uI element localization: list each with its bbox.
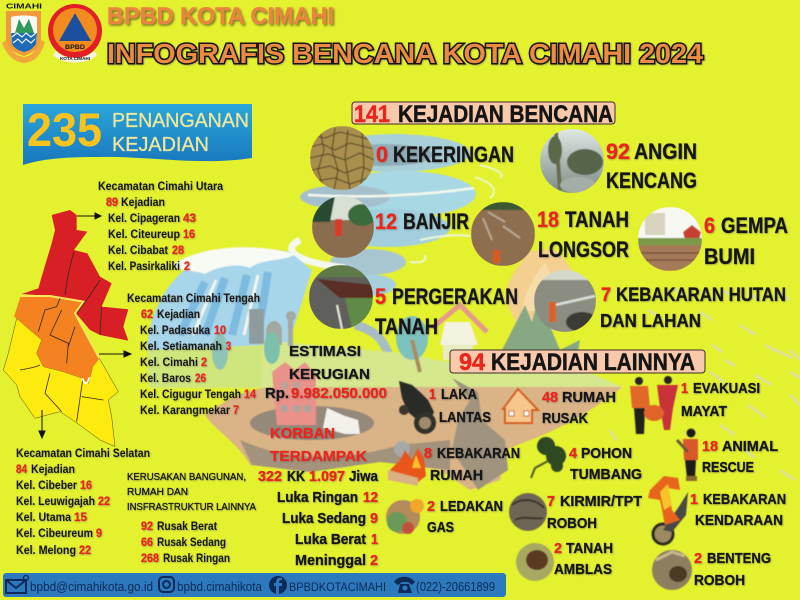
label: banjir: 12 <box>375 209 397 234</box>
label: angin kencang: ANGIN <box>634 139 697 164</box>
label: ledakan gas: LEDAKAN <box>440 498 503 515</box>
text block: korban terdampak: Luka Berat <box>295 531 366 548</box>
label: tanah amblas <box>554 540 613 578</box>
text block: Kecamatan Cimahi Utara: 89 <box>106 195 118 209</box>
text block: korban terdampak: 1.097 <box>309 468 345 485</box>
ground with crater <box>205 387 622 490</box>
icon: burnt motorcycle <box>399 381 436 434</box>
text block: Kecamatan Cimahi Tengah: Kel. Baros <box>140 371 191 385</box>
text block: Kecamatan Cimahi Utara: 16 <box>183 227 195 241</box>
label: pohon tumbang: TUMBANG <box>570 466 642 483</box>
label: kebakaran hutan: 7 <box>601 285 611 306</box>
photo: kekeringan <box>310 126 374 190</box>
label: tanah amblas: TANAH <box>566 540 613 557</box>
label: ledakan gas: 2 <box>427 498 435 515</box>
text block: Kecamatan Cimahi Tengah: Kecamatan Cimahi Tengah <box>127 291 260 305</box>
label: tanah amblas: AMBLAS <box>554 561 612 578</box>
label: kebakaran rumah: 8 <box>424 445 432 462</box>
label: rumah rusak: RUMAH <box>562 389 616 406</box>
banner: 235 penanganan kejadian: PENANGANAN <box>112 110 249 132</box>
text block: Kecamatan Cimahi Tengah: Kel. Karangmekar <box>140 403 230 417</box>
text block: kerusakan bangunan: INSFRASTRUKTUR LAINNYA <box>127 501 256 513</box>
text block: korban terdampak: 2 <box>370 552 378 569</box>
icon: instagram <box>159 577 174 592</box>
icon: fallen tree <box>531 437 566 478</box>
text block: kerusakan bangunan: Rusak Ringan <box>163 551 230 565</box>
text block: estimasi kerugian: KERUGIAN <box>289 366 370 383</box>
text block: Kecamatan Cimahi Tengah: 14 <box>244 387 256 401</box>
label: tanah longsor: LONGSOR <box>538 237 629 262</box>
label: angin kencang <box>606 139 697 193</box>
text block: Kecamatan Cimahi Tengah: 10 <box>214 323 226 337</box>
text: instagram: bpbd.cimahikota <box>177 579 263 594</box>
text block: korban terdampak: 12 <box>363 489 378 506</box>
label: laka lantas: LAKA <box>441 386 477 403</box>
text block: korban terdampak: Luka Ringan <box>277 489 358 506</box>
text block: korban terdampak: TERDAMPAK <box>270 448 367 465</box>
text: email: bpbd@cimahikota.go.id <box>30 579 153 594</box>
city skyline <box>212 309 296 370</box>
label: rumah rusak: RUSAK <box>542 410 588 427</box>
icon: burning motorcycle <box>648 476 688 544</box>
label: kebakaran kendaraan: KEBAKARAN <box>703 491 786 508</box>
photo: pergerakan tanah <box>309 265 373 329</box>
banner: 235 penanganan kejadian <box>23 103 252 165</box>
text block: Kecamatan Cimahi Selatan: 9 <box>96 526 102 540</box>
label: angin kencang: KENCANG <box>606 168 697 193</box>
text block: Kecamatan Cimahi Utara: Kecamatan Cimahi Utara <box>98 179 223 193</box>
arrow: Cimahi Selatan <box>39 410 45 438</box>
photo: benteng roboh <box>652 550 692 590</box>
label: kebakaran kendaraan: KENDARAAN <box>695 512 783 529</box>
text block: estimasi kerugian <box>265 343 387 402</box>
truck <box>323 408 360 434</box>
logo: BPBD <box>48 4 102 62</box>
label: kirmir/TPT roboh: KIRMIR/TPT <box>560 493 642 510</box>
text block: Kecamatan Cimahi Utara: Kel. Pasirkaliki <box>108 259 180 273</box>
district: Cimahi Utara <box>22 210 128 341</box>
label: evakuasi mayat: EVAKUASI <box>693 380 760 397</box>
text block: Kecamatan Cimahi Utara: 28 <box>172 243 184 257</box>
text: facebook: BPBDKOTACIMAHI <box>289 580 386 594</box>
text block: korban terdampak: KORBAN <box>270 425 335 442</box>
label: pohon tumbang <box>569 445 642 483</box>
text block: Kecamatan Cimahi Selatan: Kejadian <box>31 462 75 476</box>
text block: Kecamatan Cimahi Tengah: Kejadian <box>157 307 200 321</box>
text block: Kecamatan Cimahi Tengah: Kel. Setiamanah <box>140 339 222 353</box>
text block: kerusakan bangunan: Rusak Berat <box>157 519 217 533</box>
label: rumah rusak <box>542 389 616 427</box>
house <box>396 305 487 372</box>
text block: korban terdampak: Jiwa <box>349 468 379 485</box>
label: tanah longsor: TANAH <box>565 207 629 232</box>
label: pergerakan tanah <box>375 284 518 339</box>
text block: Kecamatan Cimahi Selatan <box>16 446 150 557</box>
label: kebakaran hutan <box>600 285 786 331</box>
text: telephone: (022)-20661899 <box>416 579 495 594</box>
text block: kerusakan bangunan: 92 <box>141 519 153 533</box>
district: Cimahi Tengah <box>14 296 99 383</box>
photo: tanah amblas <box>516 543 554 581</box>
background illustration: disaster scene <box>147 134 800 490</box>
text block: korban terdampak: Meninggal <box>295 552 366 569</box>
text block: Kecamatan Cimahi Selatan: 22 <box>98 494 110 508</box>
text block: Kecamatan Cimahi Tengah: 62 <box>141 307 153 321</box>
label: pergerakan tanah: TANAH <box>375 314 438 339</box>
label: pohon tumbang: 4 <box>569 445 578 462</box>
text block: Kecamatan Cimahi Utara: Kejadian <box>121 195 165 209</box>
label: evakuasi mayat: MAYAT <box>681 403 727 420</box>
icon: damaged house <box>503 389 538 423</box>
text block: Kecamatan Cimahi Selatan: Kel. Leuwigajah <box>16 494 95 508</box>
label: tanah longsor <box>537 207 629 262</box>
icon: animal rescue officer <box>677 428 698 481</box>
text block: kerusakan bangunan <box>127 471 256 565</box>
label: gempa bumi: BUMI <box>704 244 755 269</box>
text block: estimasi kerugian: 9.982.050.000 <box>291 385 387 402</box>
label: pohon tumbang: POHON <box>581 445 632 462</box>
label: benteng roboh: ROBOH <box>694 572 745 589</box>
icon: telephone <box>394 577 415 593</box>
text block: Kecamatan Cimahi Utara: Kel. Citeureup <box>108 227 180 241</box>
label: evakuasi mayat <box>681 380 760 420</box>
heading: 94 kejadian lainnya: KEJADIAN LAINNYA <box>491 349 695 376</box>
text block: Kecamatan Cimahi Tengah <box>127 291 260 417</box>
footer contact bar <box>3 573 506 597</box>
forest fire <box>502 249 585 352</box>
photo: banjir <box>312 196 376 258</box>
text block: Kecamatan Cimahi Selatan: Kecamatan Cimahi Selatan <box>16 446 150 460</box>
label: ledakan gas: GAS <box>427 519 454 536</box>
text block: Kecamatan Cimahi Tengah: Kel. Cigugur Tengah <box>140 387 241 401</box>
label: animal rescue: ANIMAL <box>722 438 778 455</box>
label: tanah amblas: 2 <box>554 540 562 557</box>
label: animal rescue: 18 <box>702 438 718 455</box>
tidal wave <box>147 247 312 375</box>
label: angin kencang: 92 <box>606 139 630 164</box>
logo: BPBD: BPBD <box>65 45 86 51</box>
label: gempa bumi <box>704 213 788 269</box>
photo: gempa bumi <box>638 207 702 271</box>
label: ledakan gas <box>427 498 503 536</box>
label: kekeringan: 0 <box>376 142 388 167</box>
label: tanah longsor: 18 <box>537 207 559 232</box>
label: benteng roboh <box>694 550 771 589</box>
text block: kerusakan bangunan: KERUSAKAN BANGUNAN, <box>127 471 246 483</box>
photo: kirmir/TPT <box>509 493 547 531</box>
label: kebakaran hutan: DAN LAHAN <box>600 311 701 331</box>
title: BPBD Kota Cimahi: BPBD KOTA CIMAHI <box>107 3 334 30</box>
text block: Kecamatan Cimahi Utara: Kel. Cibabat <box>108 243 168 257</box>
text block: Kecamatan Cimahi Selatan: 84 <box>16 462 27 476</box>
text block: Kecamatan Cimahi Tengah: 3 <box>226 339 231 353</box>
text block: Kecamatan Cimahi Tengah: 2 <box>201 355 207 369</box>
label: benteng roboh: BENTENG <box>707 550 771 567</box>
label: kebakaran kendaraan: 1 <box>690 491 698 508</box>
label: kebakaran rumah: RUMAH <box>430 467 483 484</box>
label: pergerakan tanah: 5 <box>375 284 386 309</box>
text block: kerusakan bangunan: 268 <box>141 551 159 565</box>
pale green hills <box>147 345 262 388</box>
heading: 94 kejadian lainnya: 94 <box>459 349 486 376</box>
label: animal rescue: RESCUE <box>702 459 754 476</box>
photo: kebakaran hutan <box>534 270 598 332</box>
heading: 141 kejadian bencana: 141 <box>354 101 390 128</box>
map of Kota Cimahi <box>3 210 128 447</box>
arrow: Cimahi Tengah <box>99 351 131 357</box>
text block: korban terdampak <box>258 425 379 569</box>
text block: kerusakan bangunan: Rusak Sedang <box>157 535 226 549</box>
text block: Kecamatan Cimahi Selatan: Kel. Melong <box>16 543 76 557</box>
icon: email <box>6 576 28 593</box>
photo: tanah longsor <box>471 202 535 266</box>
logo: Kota Cimahi shield <box>2 4 45 63</box>
label: kebakaran rumah <box>424 445 520 484</box>
text block: Kecamatan Cimahi Selatan: 22 <box>79 543 91 557</box>
arrow: Cimahi Utara <box>77 213 101 219</box>
label: animal rescue <box>702 438 778 476</box>
label: kekeringan: KEKERINGAN <box>393 142 514 167</box>
text block: Kecamatan Cimahi Selatan: Kel. Utama <box>16 510 71 524</box>
banner: 235 penanganan kejadian: 235 <box>27 103 102 156</box>
logo: Kota Cimahi shield: CIMAHI <box>6 4 42 10</box>
heading: 141 kejadian bencana: KEJADIAN BENCANA <box>398 101 613 128</box>
banner: 235 penanganan kejadian: KEJADIAN <box>112 134 209 156</box>
label: laka lantas <box>429 386 491 426</box>
logo: BPBD: KOTA CIMAHI <box>60 56 90 61</box>
text block: Kecamatan Cimahi Selatan: 15 <box>74 510 87 524</box>
label: rumah rusak: 48 <box>542 389 558 406</box>
text block: Kecamatan Cimahi Tengah: Kel. Cimahi <box>140 355 198 369</box>
text block: kerusakan bangunan: 66 <box>141 535 153 549</box>
text block: Kecamatan Cimahi Selatan: Kel. Cibeureum <box>16 526 93 540</box>
photo: angin kencang <box>540 129 604 193</box>
text block: estimasi kerugian: ESTIMASI <box>289 343 361 360</box>
label: gempa bumi: 6 <box>704 213 715 238</box>
district: Cimahi Selatan <box>3 318 118 447</box>
text block: korban terdampak: 322 <box>258 468 282 485</box>
text block: kerusakan bangunan: RUMAH DAN <box>127 486 188 498</box>
text block: korban terdampak: Luka Sedang <box>282 510 366 527</box>
label: pergerakan tanah: PERGERAKAN <box>392 284 518 309</box>
label: gempa bumi: GEMPA <box>721 213 788 238</box>
text block: Kecamatan Cimahi Utara: 2 <box>184 259 190 273</box>
label: benteng roboh: 2 <box>694 550 702 567</box>
pink building <box>272 362 316 425</box>
text block: Kecamatan Cimahi Tengah: 7 <box>233 403 239 417</box>
text block: Kecamatan Cimahi Utara <box>98 179 223 273</box>
label: laka lantas: 1 <box>429 386 436 403</box>
icon: gas explosion <box>386 499 424 534</box>
icon: facebook <box>269 576 287 594</box>
icon: body evacuation team <box>630 376 678 434</box>
text block: Kecamatan Cimahi Utara: Kel. Cipageran <box>108 211 180 225</box>
text block: Kecamatan Cimahi Selatan: Kel. Cibeber <box>16 478 77 492</box>
text block: Kecamatan Cimahi Tengah: 26 <box>195 371 206 385</box>
label: evakuasi mayat: 1 <box>681 380 688 397</box>
wind streaks <box>610 288 800 480</box>
label: kirmir/TPT roboh: 7 <box>547 493 555 510</box>
label: kirmir/TPT roboh: ROBOH <box>547 515 597 532</box>
tornado <box>292 134 502 360</box>
icon: burning house <box>388 441 426 486</box>
text block: korban terdampak: 9 <box>370 510 378 527</box>
text block: Kecamatan Cimahi Tengah: Kel. Padasuka <box>140 323 210 337</box>
text block: estimasi kerugian: Rp. <box>265 385 289 402</box>
text block: korban terdampak: KK <box>287 468 305 485</box>
text block: Kecamatan Cimahi Utara: 43 <box>183 211 196 225</box>
label: banjir: BANJIR <box>403 209 469 234</box>
label: kebakaran rumah: KEBAKARAN <box>437 445 520 462</box>
text block: korban terdampak: 1 <box>371 531 378 548</box>
title: Infografis Bencana Kota Cimahi 2024: INFOGRAFIS BENCANA KOTA CIMAHI 2024 <box>107 38 703 69</box>
text block: Kecamatan Cimahi Selatan: 16 <box>80 478 92 492</box>
label: kirmir/TPT roboh <box>547 493 642 532</box>
label: laka lantas: LANTAS <box>439 409 491 426</box>
label: kebakaran kendaraan <box>690 491 786 529</box>
